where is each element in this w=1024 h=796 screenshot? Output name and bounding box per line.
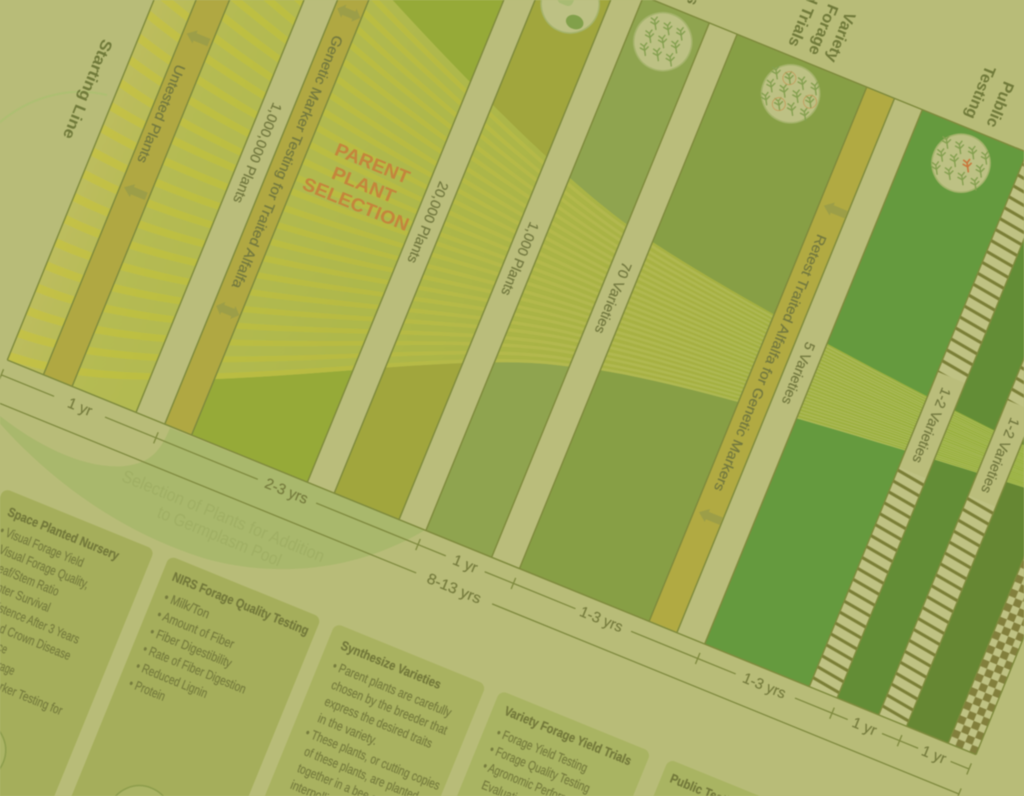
panel text: • Parent plants are carefully (331, 658, 454, 720)
label: 1-2 varieties first: 1-2 Varieties (909, 386, 954, 466)
label: retest traited alfalfa: Retest Traited Alfalfa for Genetic Markers (711, 232, 830, 494)
label: 1,000,000 plants: 1,000,000 Plants (230, 101, 285, 206)
arrow: untested lower (121, 181, 149, 203)
panel list (0, 523, 120, 735)
timeline: stage durations: 1-3 yrs (740, 670, 788, 702)
heading: parent plant selection: PLANT (329, 162, 400, 207)
panel list (127, 589, 269, 731)
stage label: variety forage yield trials: Variety (822, 10, 858, 65)
panel list: • Visual Forage Yield (0, 523, 86, 570)
icon: circle with pot and plant (532, 0, 608, 42)
panel: public testing (480, 759, 820, 796)
panel: space planted nursery (0, 488, 155, 796)
icon: panel circle (0, 708, 15, 792)
panel heading: Variety Forage Yield Trials (502, 703, 634, 768)
stage label: public testing (961, 63, 1019, 130)
panel: variety forage yield trials (312, 690, 651, 796)
arrow: genetic marker lower (214, 299, 242, 322)
arrow: genetic marker upper (335, 2, 363, 24)
stage label: public testing: Public (983, 79, 1016, 130)
panel list: • Fiber Digestibility (148, 624, 235, 671)
panel text: in the variety. (316, 710, 380, 748)
heading: parent plant selection: PARENT (332, 139, 414, 188)
gold test bands (43, 0, 918, 633)
checkerboard band (948, 209, 1024, 755)
panel heading: Space Planted Nursery (6, 504, 122, 563)
icon: panel circle (98, 776, 181, 796)
hatched bands (809, 152, 1024, 726)
panel text: express the desired traits (322, 694, 435, 751)
stage label: variety forage yield trials: Forage (805, 2, 841, 57)
pale count bands (136, 0, 1024, 726)
label: genetic marker testing: Genetic Marker Testing for Traited Alfalfa (229, 33, 346, 291)
timeline: stage durations: 1 yr (450, 552, 480, 577)
heading: parent plant selection: SELECTION (300, 173, 412, 235)
arrow: retest upper (821, 199, 849, 221)
panel list: • Amount of Fiber (155, 607, 237, 652)
arrow: retest lower (696, 506, 724, 528)
label: 1-2 varieties second: 1-2 Varieties (978, 416, 1023, 496)
icon: plant grid with selected red plant (923, 125, 999, 201)
panel text (283, 658, 470, 796)
label: starting line: Starting Line (59, 37, 115, 141)
panel list: • Forage Yield Testing (494, 725, 590, 775)
panel list: • Milk/Ton (162, 589, 212, 621)
germplasm selection crescent (0, 412, 425, 569)
icon: plant grid with ringed plants (753, 56, 828, 132)
label: 1,000 plants: 1,000 Plants (498, 220, 542, 298)
timeline: stage durations: 1 yr (919, 743, 948, 768)
panel: NIRS forage quality testing (0, 556, 321, 796)
label: 20,000 plants: 20,000 Plants (404, 179, 452, 266)
label: 5 varieties: 5 Varieties (779, 340, 819, 407)
panel list (474, 725, 605, 796)
label: untested plants: Untested Plants (134, 62, 189, 166)
stage label: public testing: Testing (961, 63, 998, 121)
stage label: variety forage yield trials (784, 0, 870, 65)
germplasm return arc (0, 92, 107, 124)
heading: parent plant selection (300, 132, 429, 235)
arrow: untested upper (184, 27, 212, 49)
panel heading: Synthesize Varieties (339, 638, 444, 692)
germplasm label: to Germplasm Pool (155, 502, 284, 570)
germplasm label: Selection of Plants for Addition (119, 466, 328, 566)
timeline: stage durations: 1 yr (849, 714, 879, 739)
label: 70 varieties: 70 Varieties (592, 260, 635, 336)
timeline: stage durations: 1 yr (65, 395, 95, 420)
panel list: • Reduced Lignin (134, 658, 210, 701)
icon: 3x3 plant grid (625, 4, 701, 80)
timeline: stage durations: 1-3 yrs (577, 603, 625, 636)
panel text: chosen by the breeder that (329, 677, 450, 738)
panel list: • Protein (127, 676, 168, 704)
panel list: • Rate of Fiber Digestion (141, 641, 248, 696)
timeline: stage durations: 2-3 yrs (262, 475, 310, 508)
timeline: stage durations (0, 367, 972, 777)
panel heading: NIRS Forage Quality Testing (170, 569, 311, 638)
timeline: total 8-13 yrs: 8-13 yrs (424, 570, 484, 608)
panel: synthesize varieties (147, 623, 486, 796)
